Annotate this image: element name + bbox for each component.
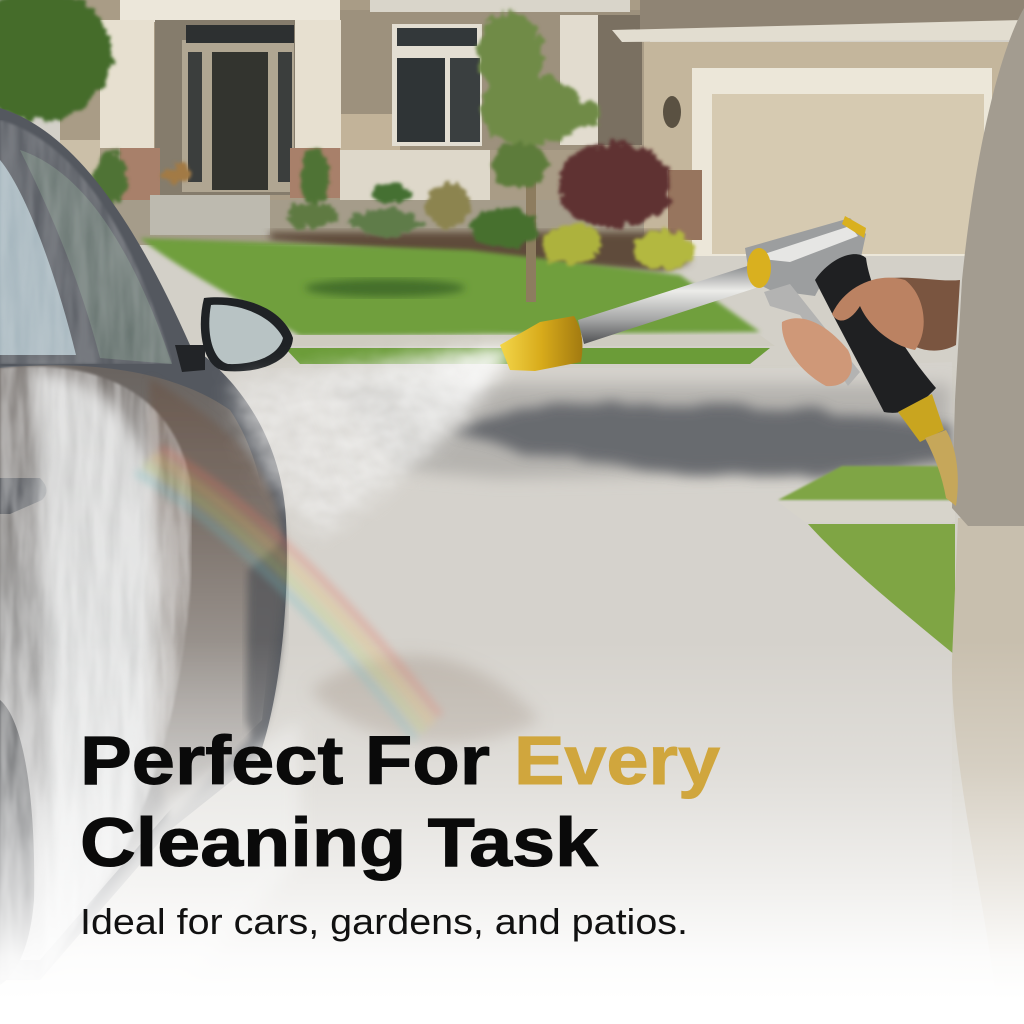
shirt (952, 8, 1024, 526)
rainbow (136, 448, 440, 740)
foam streaks (0, 366, 192, 980)
house facade (60, 0, 700, 245)
mulch bed (270, 232, 690, 272)
car (0, 108, 300, 1000)
hose (925, 430, 958, 506)
trigger (764, 284, 860, 386)
nozzle (500, 316, 582, 371)
foam sheet (30, 372, 162, 980)
forearm (890, 278, 960, 351)
door panel (0, 365, 271, 960)
barrel (578, 262, 768, 344)
person (890, 8, 1024, 1024)
trousers (952, 518, 1024, 1024)
spray gun (500, 216, 958, 506)
thumb and back of hand (832, 278, 924, 350)
connector (898, 394, 944, 442)
droplets on window (0, 120, 172, 364)
water spray (232, 347, 512, 536)
side windows (0, 160, 76, 355)
subtitle: Ideal for cars, gardens, and patios. (80, 901, 688, 942)
door handle (0, 478, 47, 514)
garage (612, 0, 1024, 256)
wheel arch (0, 700, 34, 985)
driveway and street (230, 362, 952, 1024)
side mirror (175, 297, 293, 372)
heading: Perfect For (80, 722, 490, 799)
tree top left (0, 0, 112, 121)
shrubs (95, 143, 694, 270)
fender reflection (140, 378, 282, 820)
lawn (140, 238, 760, 336)
front wheel and tyre edge (246, 540, 285, 745)
fingers (782, 318, 852, 386)
white fade (0, 640, 1024, 1024)
heading: Cleaning Task (80, 804, 599, 881)
small tree (478, 10, 601, 302)
right lawn patches (778, 466, 955, 500)
heading (80, 722, 720, 881)
lower body blend (30, 720, 300, 1000)
grip (815, 254, 936, 413)
body (745, 218, 866, 296)
heading: Every (514, 722, 720, 799)
